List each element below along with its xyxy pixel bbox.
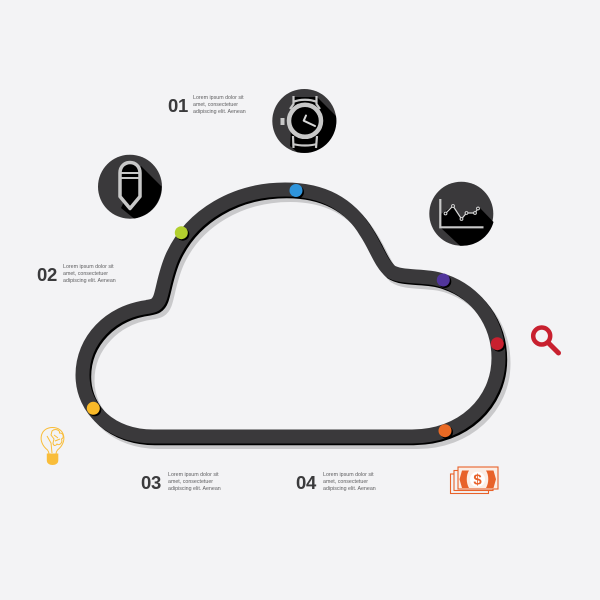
- block 04 text: amet, consectetuer: [323, 479, 368, 485]
- block 03 text: Lorem ipsum dolor sit: [168, 472, 219, 478]
- marker: blue: [290, 184, 304, 198]
- block 03 text: adipiscing elit. Aenean: [168, 486, 221, 492]
- block 03 number: 03: [141, 472, 161, 492]
- block 02 number: 02: [37, 264, 57, 284]
- cloud outline: [82, 190, 504, 442]
- icon: money: $: [473, 472, 482, 488]
- marker: yellow: [87, 402, 101, 416]
- block 02 text: adipiscing elit. Aenean: [63, 278, 116, 284]
- icon: pencil: [98, 155, 162, 219]
- block 02 text: amet, consectetuer: [63, 271, 108, 277]
- block 04 text: Lorem ipsum dolor sit: [323, 472, 374, 478]
- icon: light bulb: [41, 428, 64, 465]
- icon: magnifier: [533, 328, 558, 353]
- marker: red: [491, 337, 505, 352]
- marker: orange: [438, 424, 453, 439]
- block 01 number: 01: [168, 94, 188, 116]
- block 01 text: Lorem ipsum dolor sit: [193, 94, 244, 100]
- block 02 text: [63, 264, 116, 284]
- block 04 number: 04: [296, 472, 316, 492]
- icon: watch: [272, 89, 336, 153]
- block 03 text: amet, consectetuer: [168, 479, 213, 485]
- icon: line chart: [429, 182, 494, 246]
- block 03 text: [168, 472, 221, 492]
- block 04 text: adipiscing elit. Aenean: [323, 486, 376, 492]
- block 02 text: Lorem ipsum dolor sit: [63, 264, 114, 270]
- icon: money: [450, 467, 498, 494]
- block 01 text: amet, consectetuer: [193, 102, 238, 108]
- block 01 text: adipiscing elit. Aenean: [193, 109, 246, 115]
- marker: purple: [437, 274, 451, 288]
- block 04 text: [323, 472, 376, 492]
- block 01 text: [193, 94, 246, 115]
- marker: green: [175, 226, 189, 241]
